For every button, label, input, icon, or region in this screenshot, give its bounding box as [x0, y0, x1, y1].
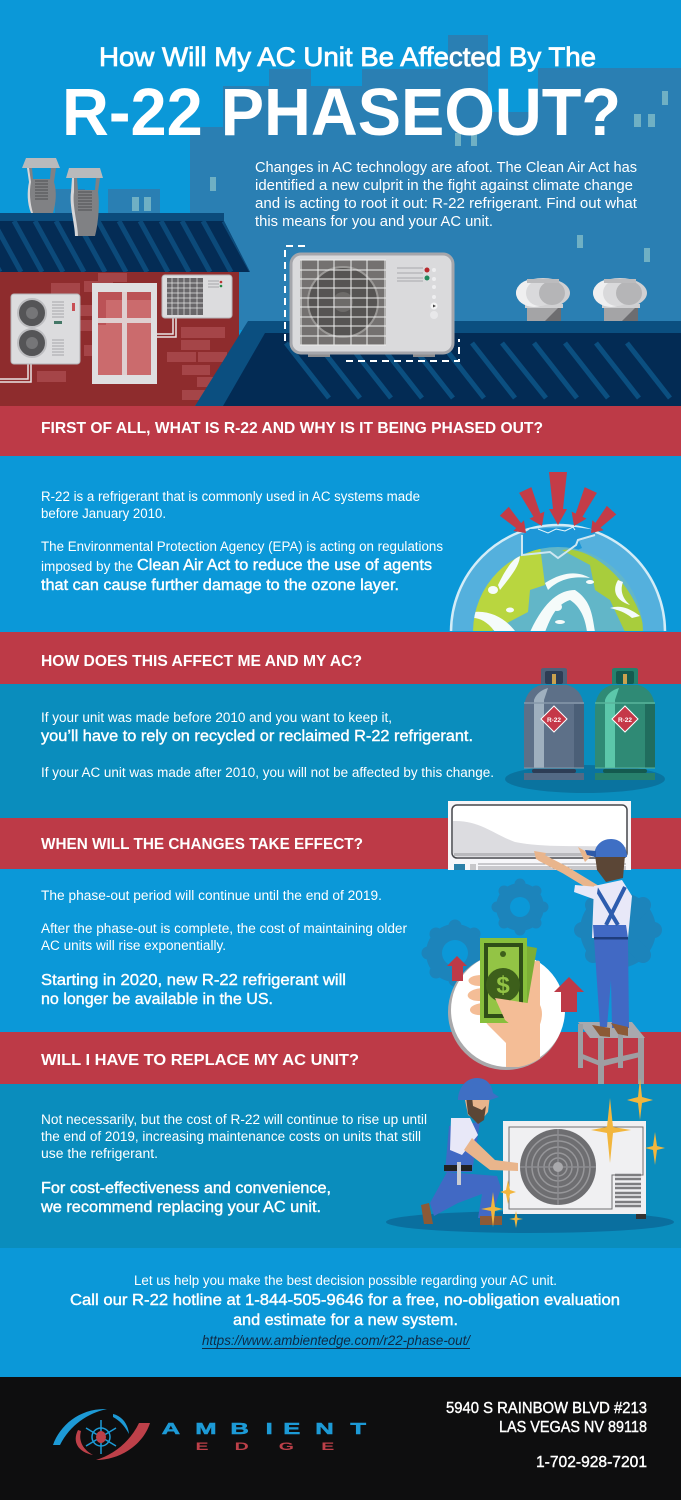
body text: Not necessarily, but the cost of R-22 will continue to rise up until: [41, 1112, 427, 1127]
body text: AC units will rise exponentially.: [41, 938, 226, 953]
illustration: foreground roof: [195, 321, 681, 406]
title: How Will My AC Unit Be Affected By The: [99, 42, 596, 72]
body text: If your AC unit was made after 2010, you will not be affected by this change.: [41, 765, 494, 780]
red arrows: [499, 472, 617, 538]
panel: how does this affect me: [0, 632, 681, 818]
heading band: [0, 632, 681, 684]
body text: the end of 2019, increasing maintenance costs on units that still: [41, 1129, 421, 1144]
shadow: [386, 1211, 674, 1233]
intro text: Changes in AC technology are afoot. The Clean Air Act has: [255, 160, 637, 176]
body text: that can cause further damage to the ozone layer.: [41, 577, 399, 594]
illustration: chimneys: [22, 158, 103, 236]
body text: [41, 489, 443, 594]
body text: [41, 888, 408, 1008]
logo: [53, 1409, 366, 1460]
body text: use the refrigerant.: [41, 1146, 158, 1161]
arms: [540, 857, 598, 890]
body text: After the phase-out is complete, the cost of maintaining older: [41, 921, 408, 936]
window: [92, 283, 157, 384]
pipes: [0, 318, 176, 382]
icon: background gears: [426, 883, 656, 982]
icon: refrigerant cylinders: [505, 668, 665, 793]
panel: call to action: [0, 1248, 681, 1377]
title: R-22 PHASEOUT?: [62, 75, 621, 150]
intro text: and is acting to root it out: R-22 refrigerant. Find out what: [255, 196, 637, 212]
brick wall: [0, 272, 239, 406]
roof: [0, 213, 252, 272]
icon: refrigerant cylinders: R-22: [618, 717, 632, 724]
heading band: [0, 406, 681, 456]
body text: imposed by the: [41, 559, 133, 574]
logo: EDGE: [196, 1440, 335, 1453]
panel: call to action: Let us help you make the best decision possible regarding your AC unit.: [134, 1273, 557, 1288]
legs: [594, 938, 629, 1028]
illustration: money in hand with red arrows: $: [496, 972, 510, 999]
logo wordmark: AMBIENT: [162, 1420, 366, 1438]
left outdoor unit: [11, 294, 80, 364]
panel: call to action: Call our R-22 hotline at 1-844-505-9646 for a free, no-obligation evaluation: [70, 1292, 620, 1309]
body text: The Environmental Protection Agency (EPA) is acting on regulations: [41, 539, 443, 554]
address and phone: 5940 S RAINBOW BLVD #213: [446, 1400, 647, 1417]
body text: no longer be available in the US.: [41, 991, 273, 1008]
body text: For cost-effectiveness and convenience,: [41, 1180, 331, 1197]
heading band: WHEN WILL THE CHANGES TAKE EFFECT?: [41, 836, 363, 853]
panel: what is R-22: [0, 406, 681, 631]
illustration: roof vents: [516, 278, 647, 321]
illustration: technician on stool: [534, 839, 645, 1084]
illustration: technician with outdoor unit: [386, 1078, 674, 1233]
background: sky and skyline: [0, 0, 681, 406]
outdoor unit: [503, 1121, 646, 1219]
torso: [592, 880, 632, 938]
body text: [41, 710, 494, 780]
illustration: indoor AC unit: [448, 801, 631, 870]
stool: [578, 1022, 645, 1084]
panel: when will the changes take effect: [0, 818, 681, 1032]
intro text: this means for you and your AC unit.: [255, 214, 493, 230]
heading band: WILL I HAVE TO REPLACE MY AC UNIT?: [41, 1052, 359, 1069]
heading band: [0, 1032, 681, 1084]
body text: Clean Air Act to reduce the use of agents: [137, 557, 432, 574]
icon: refrigerant cylinders: R-22: [547, 717, 561, 724]
body text: R-22 is a refrigerant that is commonly used in AC systems made: [41, 489, 420, 504]
intro text: [255, 160, 637, 230]
panel: call to action: https://www.ambientedge.com/r22-phase-out/: [202, 1333, 471, 1348]
logo icon: [53, 1409, 150, 1460]
gold sparkles: [481, 1078, 665, 1228]
wall unit small: [162, 275, 232, 318]
icon: cracked globe with arrows: [450, 472, 666, 631]
intro text: identified a new culprit in the fight against climate change: [255, 178, 633, 194]
heading band: HOW DOES THIS AFFECT ME AND MY AC?: [41, 653, 362, 670]
body text: Starting in 2020, new R-22 refrigerant will: [41, 972, 346, 989]
illustration: house: [0, 213, 252, 406]
head and cap: [595, 855, 625, 882]
illustration: money in hand with red arrows: [447, 938, 584, 1070]
address and phone: LAS VEGAS NV 89118: [499, 1419, 647, 1436]
shoes: [592, 1025, 610, 1037]
heading band: FIRST OF ALL, WHAT IS R-22 AND WHY IS IT BEING PHASED OUT?: [41, 420, 543, 437]
body text: we recommend replacing your AC unit.: [40, 1199, 321, 1216]
heading band: [0, 818, 681, 869]
body text: If your unit was made before 2010 and you want to keep it,: [41, 710, 392, 725]
address and phone: [446, 1400, 647, 1471]
body text: The phase-out period will continue until the end of 2019.: [41, 888, 382, 903]
person: [421, 1078, 518, 1225]
body text: you’ll have to rely on recycled or reclaimed R-22 refrigerant.: [41, 728, 473, 745]
panel: will I have to replace: [0, 1032, 681, 1248]
title: [62, 42, 621, 150]
illustration: main AC unit with dashed frame: [285, 246, 459, 361]
panel: call to action: and estimate for a new system.: [233, 1312, 458, 1329]
address and phone: 1-702-928-7201: [536, 1454, 647, 1471]
red arrows: [447, 956, 584, 1012]
body text: before January 2010.: [41, 506, 166, 521]
panel: footer: [0, 1377, 681, 1500]
body text: [40, 1112, 427, 1216]
